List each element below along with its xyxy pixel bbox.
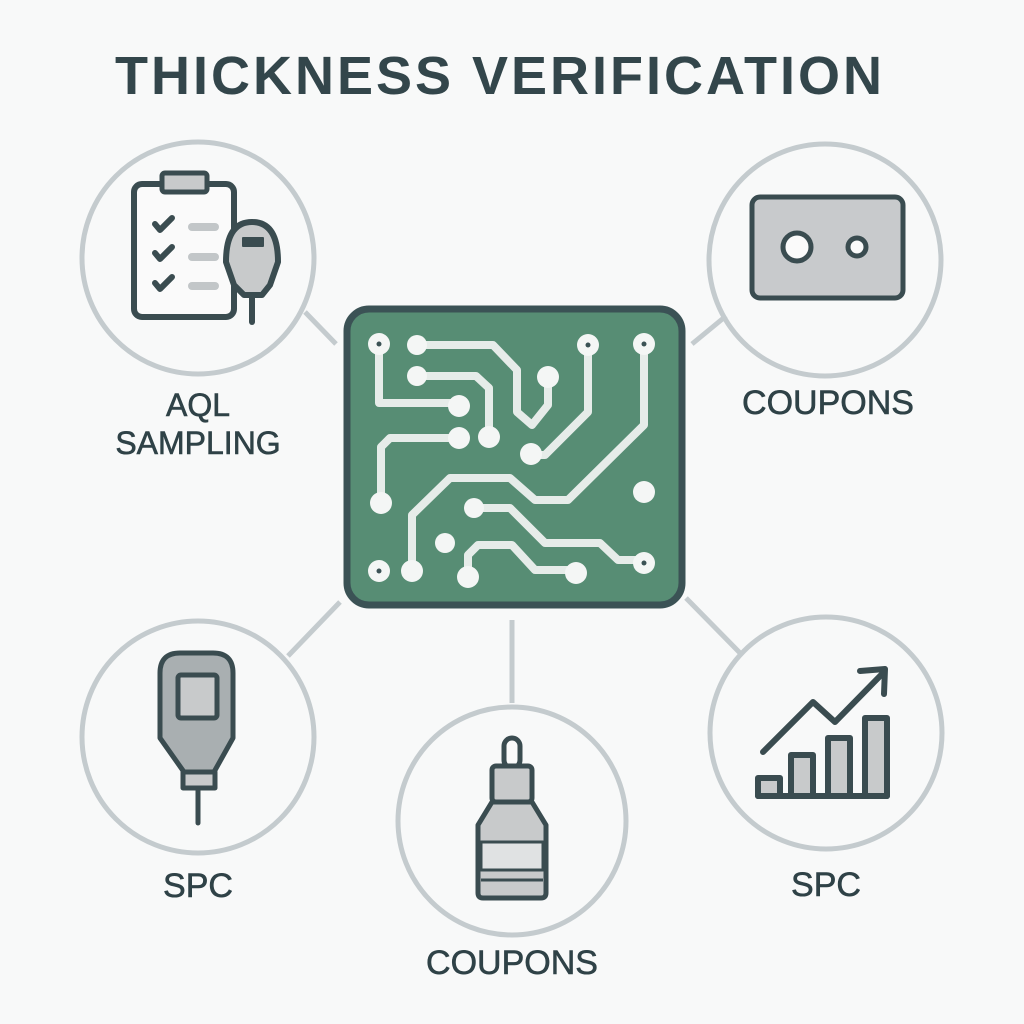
icon: chart [758, 669, 887, 796]
label: coupons: COUPONS [742, 384, 914, 422]
icon: coupon [752, 197, 903, 298]
panel: AQL sampling: SAMPLING [115, 425, 281, 461]
panel: SPC probe [82, 621, 314, 905]
panel: AQL sampling [82, 142, 314, 461]
panel: SPC chart [710, 617, 942, 904]
panel: coupons bottom [398, 707, 626, 982]
title: THICKNESS VERIFICATION [115, 46, 885, 106]
label: SPC: SPC [791, 866, 861, 904]
label: coupons: COUPONS [426, 944, 598, 982]
icon: bottle [478, 738, 546, 898]
central PCB [347, 309, 682, 605]
label: SPC: SPC [163, 867, 233, 905]
panel: coupons top [709, 144, 941, 422]
label: AQL sampling: AQL [166, 387, 230, 423]
icon: clipboard with probe [134, 173, 278, 322]
connector lines [288, 312, 742, 703]
icon: probe [160, 653, 233, 823]
